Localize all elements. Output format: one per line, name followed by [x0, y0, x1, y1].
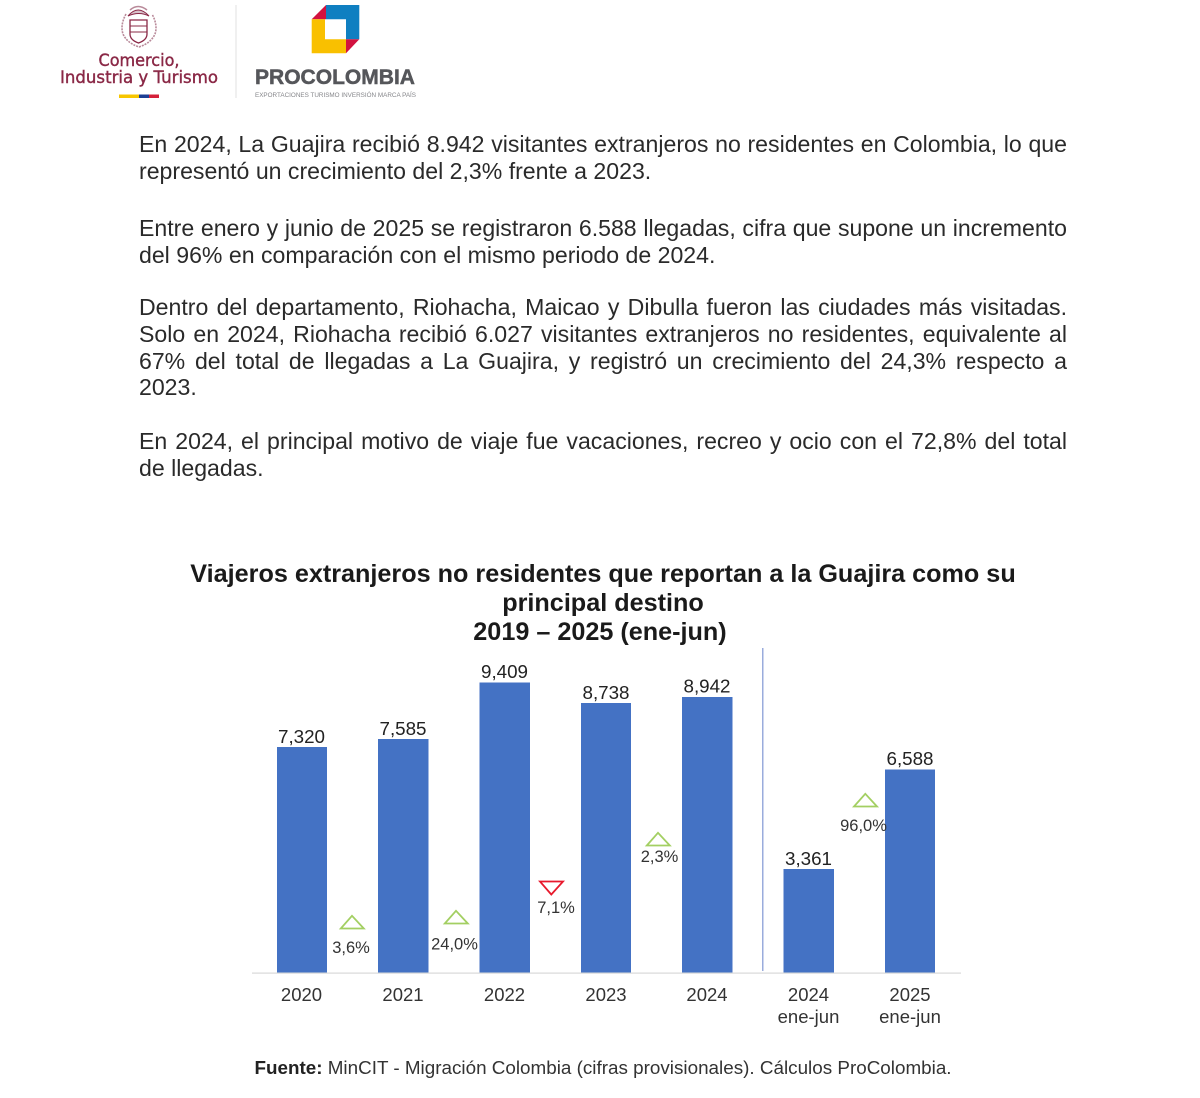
category labels: 2023 [585, 984, 627, 1005]
text block: 2024 arrivals [139, 131, 1067, 184]
category labels: 2022 [484, 984, 525, 1005]
bar value labels: 6,588 [886, 748, 934, 769]
chart title: Viajeros extranjeros no residentes que reportan a la Guajira como su [190, 560, 1016, 588]
flag bar [119, 94, 159, 98]
axis [252, 972, 961, 974]
text block: 2025 arrivals: Entre enero y junio de 2025 se registraron 6.588 llegadas, cifra que supone un incremento [139, 215, 1067, 241]
bar value labels: 3,361 [785, 848, 832, 869]
category labels: 2024 [686, 984, 728, 1005]
bar value labels: 7,320 [278, 726, 325, 747]
text block: 2024 arrivals: En 2024, La Guajira recibió 8.942 visitantes extranjeros no residentes en Colombia, lo que [139, 131, 1067, 157]
category labels: ene-jun [778, 1006, 839, 1027]
category labels: 2021 [382, 984, 424, 1005]
bar value labels: 7,585 [380, 718, 426, 739]
source note: Fuente: MinCIT - Migración Colombia (cifras provisionales). Cálculos ProColombia. [254, 1057, 952, 1078]
text block: 2025 arrivals: del 96% en comparación con el mismo periodo de 2024. [139, 242, 715, 268]
text block: most visited cities: Dentro del departamento, Riohacha, Maicao y Dibulla fueron las ciudades más visitadas. [139, 294, 1067, 320]
text block: most visited cities: Solo en 2024, Riohacha recibió 6.027 visitantes extranjeros no residentes, equivalente al [139, 321, 1067, 347]
change indicators [341, 794, 877, 928]
chart title: 2019 – 2025 (ene-jun) [473, 618, 727, 646]
icon: ProColombia square [312, 5, 359, 53]
category labels [281, 984, 941, 1027]
text block: 2024 arrivals: representó un crecimiento del 2,3% frente a 2023. [139, 158, 651, 184]
logos header [60, 5, 416, 99]
brand name: PROCOLOMBIA [255, 65, 415, 89]
ministry name: Comercio, [98, 51, 180, 71]
bar value labels: 9,409 [481, 661, 528, 682]
change percentages: 96,0% [840, 817, 887, 835]
text block: most visited cities [139, 294, 1067, 400]
icon: coat of arms [122, 6, 156, 47]
text block: travel motive: En 2024, el principal motivo de viaje fue vacaciones, recreo y ocio con el 72,8% del total [139, 428, 1067, 454]
text block: most visited cities: 67% del total de llegadas a La Guajira, y registró un crecimiento del 24,3% respecto a [139, 348, 1067, 374]
chart title [190, 560, 1016, 646]
logo: Comercio, Industria y Turismo: Industria y Turismo [60, 68, 218, 88]
tagline: EXPORTACIONES TURISMO INVERSIÓN MARCA PAÍS [255, 90, 416, 99]
logo: ProColombia [255, 5, 416, 99]
category labels: 2025 [889, 984, 931, 1005]
category labels: ene-jun [879, 1006, 941, 1027]
bar value labels: 8,942 [684, 676, 730, 696]
category labels: 2024 [788, 984, 829, 1005]
change percentages [332, 817, 887, 957]
change percentages: 3,6% [332, 939, 370, 957]
period divider [762, 648, 763, 971]
logo: Comercio, Industria y Turismo [60, 6, 218, 98]
category labels: 2020 [281, 984, 322, 1005]
bars [277, 682, 935, 973]
bar value labels: 8,738 [582, 682, 630, 703]
change percentages: 24,0% [431, 936, 478, 954]
text block: 2025 arrivals [139, 215, 1067, 268]
chart title: principal destino [502, 589, 704, 617]
text block: travel motive [139, 428, 1067, 481]
change percentages: 2,3% [641, 848, 679, 866]
change percentages: 7,1% [537, 899, 575, 917]
text block: travel motive: de llegadas. [139, 455, 264, 481]
bar value labels [278, 661, 934, 869]
text block: most visited cities: 2023. [139, 374, 197, 400]
